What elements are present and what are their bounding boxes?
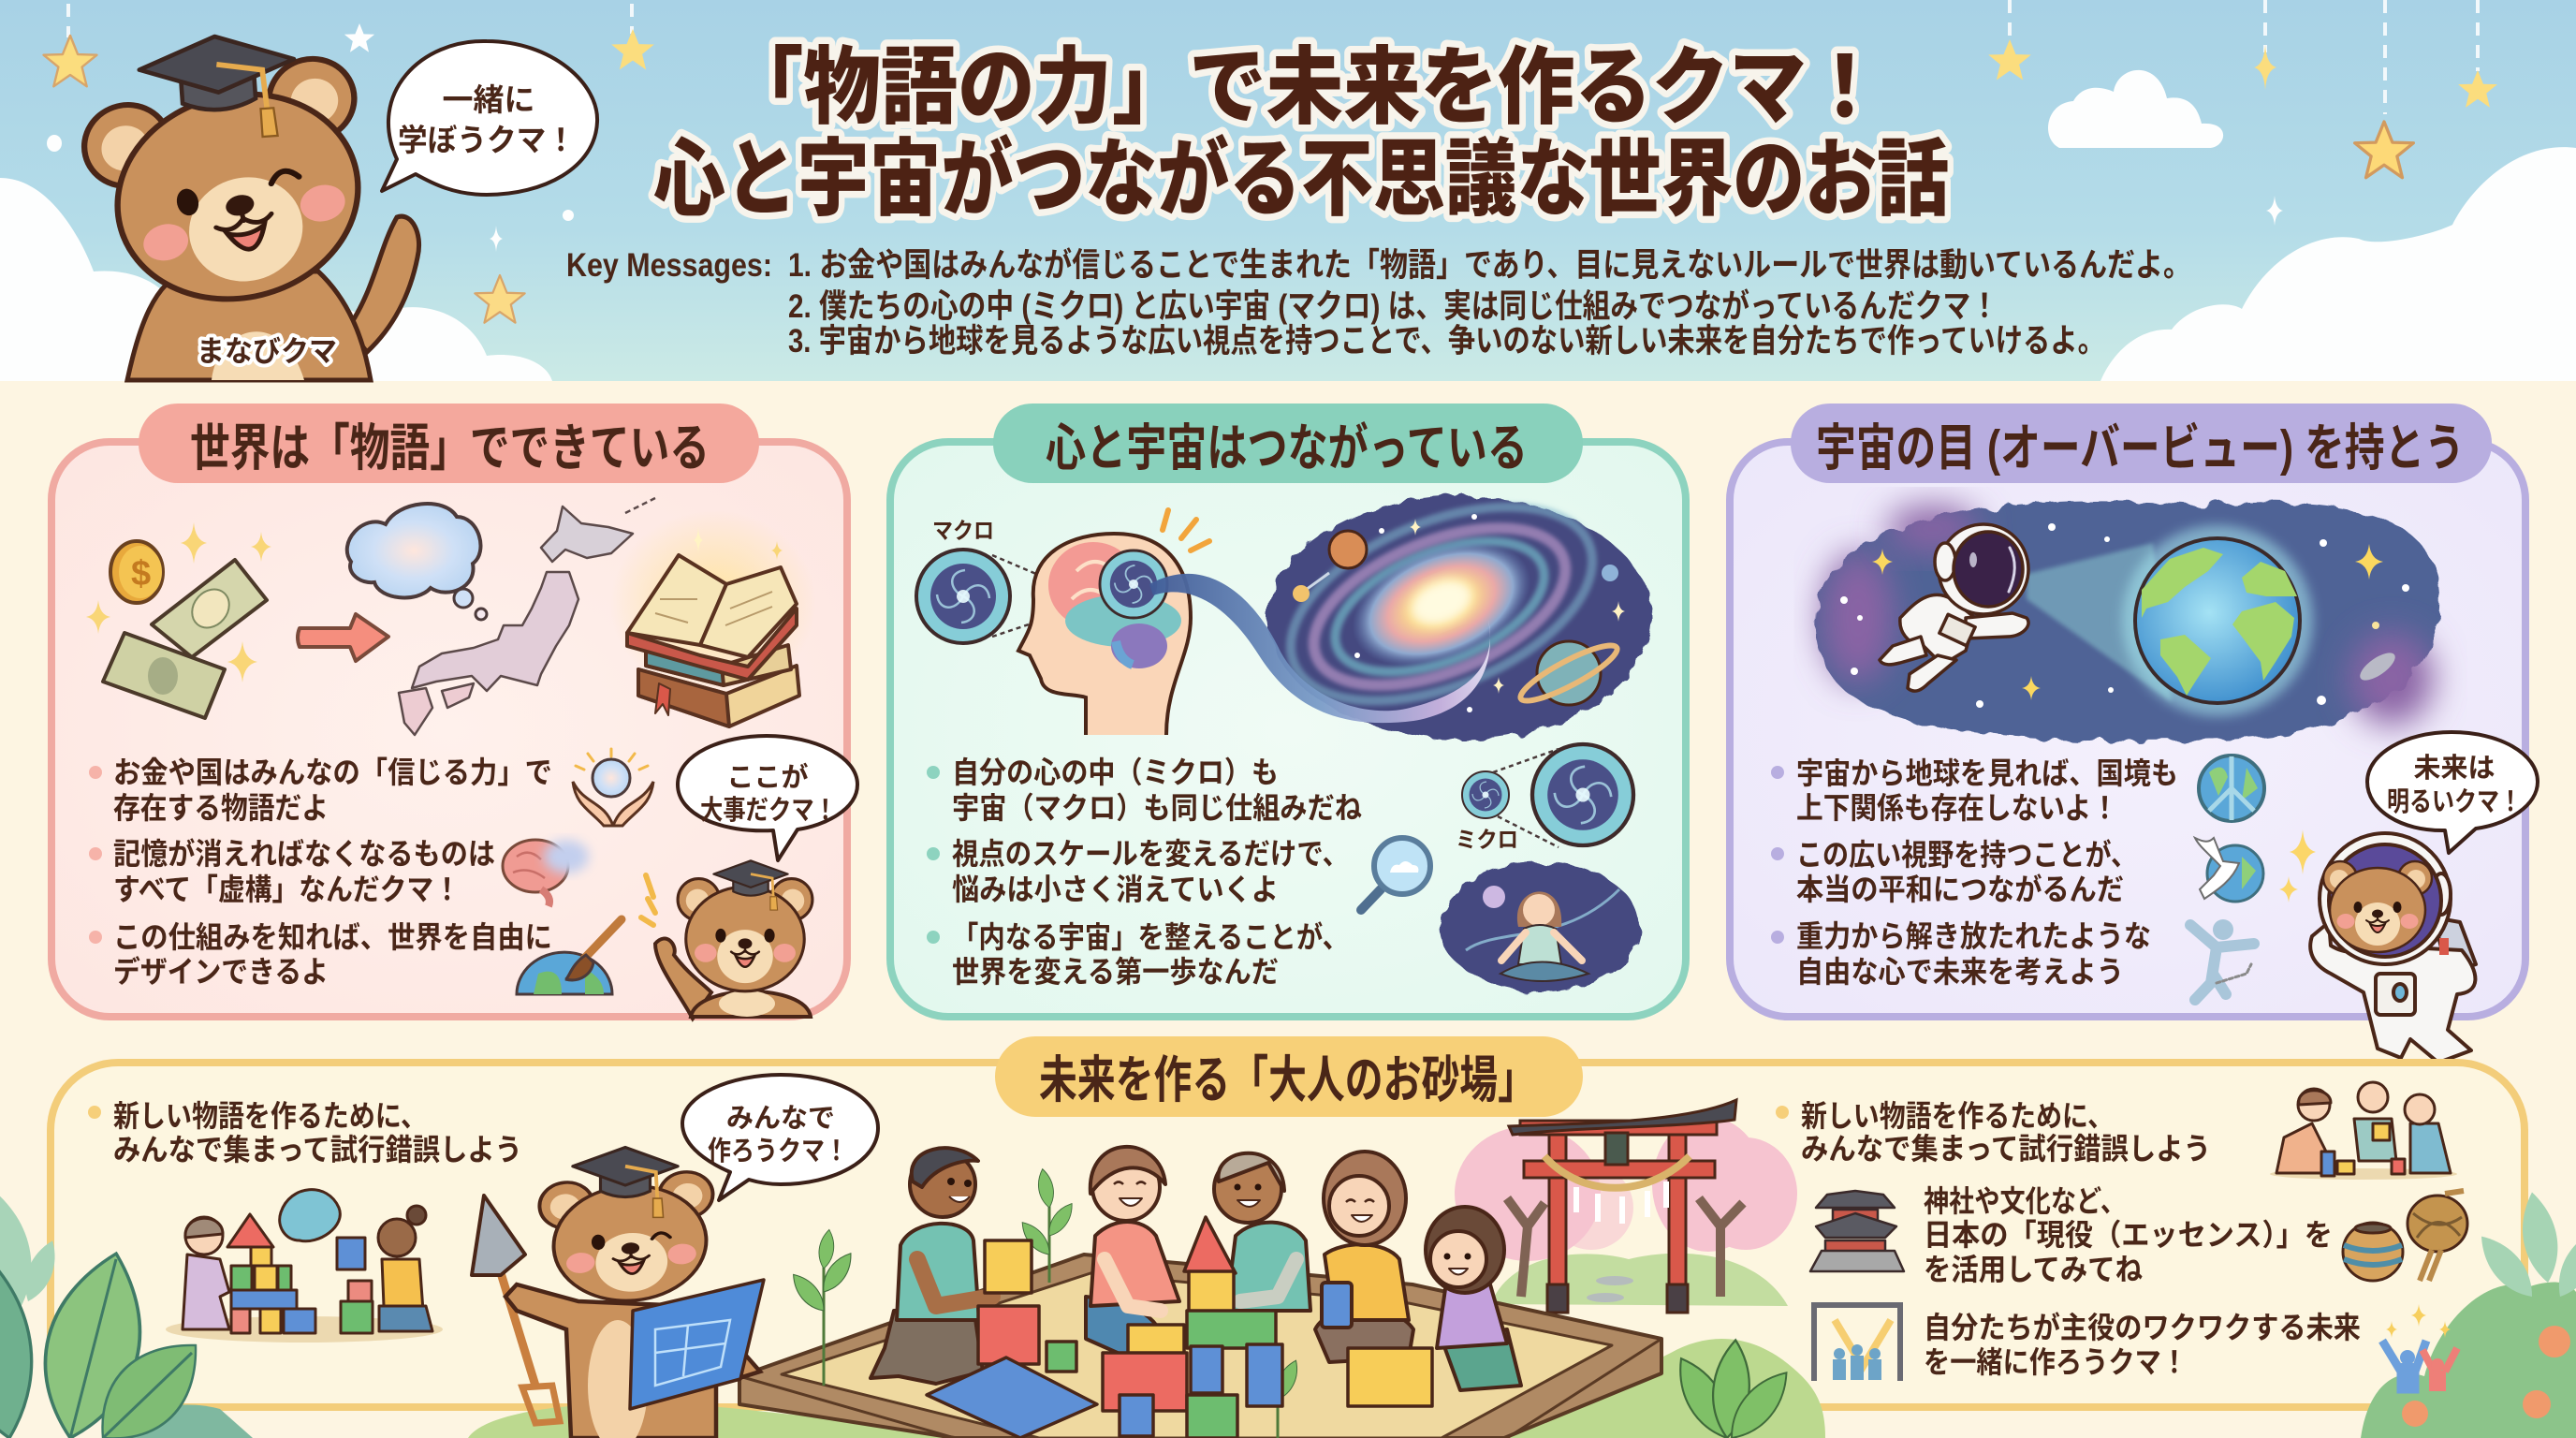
bullet list: 本当の平和につながるんだ	[1796, 873, 2124, 906]
illustration: sprouts	[787, 1167, 1798, 1438]
speech bubble: bright future	[2367, 732, 2538, 853]
bullet list: right: 日本の「現役（エッセンス）」を	[1924, 1218, 2333, 1252]
foliage: right bush	[2361, 1189, 2576, 1438]
bullet list: この仕組みを知れば、世界を自由に	[113, 920, 552, 954]
stream connecting brain to galaxy	[1149, 574, 1490, 723]
bullet list: お金や国はみんなの「信じる力」で	[113, 756, 552, 789]
bullet list: この広い視野を持つことが、	[1796, 838, 2137, 872]
panel: mind and universe are connected	[890, 404, 1686, 1017]
icon: micro circles: ミクロ	[1456, 828, 1518, 853]
speech bubble: together: 一緒に	[442, 82, 535, 117]
key messages: 1. お金や国はみんなが信じることで生まれた「物語」であり、目に見えないルールで世界は動いているんだよ。	[788, 247, 2191, 284]
illustration: galaxy	[1263, 468, 1652, 740]
bullet list: left: 新しい物語を作るために、	[113, 1099, 427, 1133]
person 5	[1426, 1207, 1521, 1390]
icon: peace earth	[2199, 756, 2264, 821]
bullet list: 上下関係も存在しないよ！	[1796, 791, 2118, 825]
illustration: story books	[610, 510, 816, 726]
icon: temple	[1810, 1191, 1904, 1271]
bullet list: right: みんなで集まって試行錯誤しよう	[1801, 1132, 2211, 1166]
panel heading	[139, 404, 759, 483]
bullet list: 自分の心の中（ミクロ）も	[952, 756, 1279, 789]
panel heading: 心と宇宙はつながっている	[1046, 420, 1528, 477]
icon: magnifying glass	[1361, 838, 1430, 910]
speech bubble: together	[382, 41, 597, 195]
key messages	[566, 247, 2191, 360]
icon: money: $	[131, 554, 151, 594]
bullet list: 自由な心で未来を考えよう	[1796, 955, 2124, 989]
speech bubble: let's build together: 作ろうクマ！	[708, 1136, 848, 1167]
bullet list: デザインできるよ	[113, 955, 329, 989]
cloud: small	[2048, 70, 2223, 148]
person 3	[1214, 1153, 1310, 1311]
icon: meditating person	[1440, 862, 1640, 991]
bullet list	[927, 756, 1362, 989]
bullet list: すべて「虚構」なんだクマ！	[113, 873, 461, 906]
bullet list: left: みんなで集まって試行錯誤しよう	[113, 1133, 522, 1167]
hanging star strings	[68, 0, 2478, 114]
bullet list: right: 自分たちが主役のワクワクする未来	[1924, 1311, 2361, 1344]
title: 「物語の力」で未来を作るクマ！	[726, 41, 1883, 135]
icon: people stacking blocks	[166, 1190, 443, 1343]
speech bubble: bright future: 未来は	[2413, 753, 2496, 784]
icon: money	[86, 522, 271, 718]
illustration: map of Japan	[399, 498, 655, 735]
bullet list: 「内なる宇宙」を整えることが、	[952, 920, 1349, 954]
icon: pot and craft	[2343, 1191, 2467, 1281]
bullet list: left	[88, 1099, 522, 1167]
person 2	[1086, 1147, 1179, 1357]
title: 心と宇宙がつながる不思議な世界のお話	[653, 133, 1949, 227]
building blocks	[927, 1217, 1432, 1438]
ground grass	[468, 1339, 1825, 1438]
person 4	[1315, 1152, 1413, 1362]
bullet list: 世界を変える第一歩なんだ	[952, 955, 1279, 989]
bullet list: 宇宙から地球を見れば、国境も	[1796, 756, 2178, 790]
panel heading	[1791, 404, 2492, 483]
icon: cheering people	[2382, 1304, 2457, 1391]
icon: paintbrush globe	[517, 919, 622, 994]
bullet list	[89, 756, 552, 989]
speech bubble: bright future: 明るいクマ！	[2387, 787, 2522, 817]
illustration: torii and cherry trees	[1455, 1100, 1797, 1313]
bullet list: right	[1776, 1099, 2361, 1379]
panel: cosmic overview	[1730, 404, 2538, 1063]
icon: thought cloud	[347, 504, 487, 620]
bullet list: 視点のスケールを変えるだけで、	[952, 837, 1349, 871]
name label: まなびクマ	[197, 335, 337, 368]
icon: dove and earth	[2195, 838, 2263, 902]
speech bubble: this matters: 大事だクマ！	[700, 795, 837, 826]
illustration: sandbox	[739, 1255, 1661, 1438]
header sky band	[0, 0, 2576, 381]
character: bear with blueprint	[472, 1147, 764, 1438]
illustration: head with brain	[1018, 510, 1209, 735]
cloud: left	[0, 178, 552, 381]
icon: micro circles	[1456, 744, 1633, 853]
panel heading: 未来を作る「大人のお砂場」	[1039, 1052, 1536, 1108]
speech bubble: together: 学ぼうクマ！	[398, 123, 576, 157]
bullet list: right: を一緒に作ろうクマ！	[1924, 1345, 2188, 1379]
foliage: left	[0, 1191, 253, 1438]
title	[653, 41, 1949, 227]
stars	[43, 23, 2497, 323]
panel: adult sandbox	[0, 1036, 2576, 1438]
speech bubble: this matters	[678, 736, 857, 860]
astronaut	[1880, 524, 2028, 691]
icon: free figure	[2190, 919, 2254, 1000]
icon: macro circle	[916, 519, 1062, 643]
illustration: space with earth	[1815, 501, 2440, 741]
icon: family building	[2270, 1082, 2457, 1180]
person 1	[871, 1148, 992, 1384]
people playing with blocks	[871, 1147, 1521, 1390]
bullet list: right: を活用してみてね	[1924, 1253, 2143, 1286]
key messages: 2. 僕たちの心の中 (ミクロ) と広い宇宙 (マクロ) は、実は同じ仕組みでつながっているんだクマ！	[788, 288, 1998, 325]
panel heading: 世界は「物語」でできている	[190, 420, 710, 477]
bullet list: 宇宙（マクロ）も同じ仕組みだね	[952, 791, 1362, 825]
bullet list: right: 新しい物語を作るために、	[1801, 1099, 2114, 1133]
character: astronaut bear	[2279, 829, 2476, 1063]
icon: macro circle: マクロ	[932, 519, 994, 544]
key messages: Key Messages:	[566, 247, 772, 284]
bullet list: 記憶が消えればなくなるものは	[113, 837, 495, 871]
icon: brain	[503, 840, 589, 906]
key messages: 3. 宇宙から地球を見るような広い視点を持つことで、争いのない新しい未来を自分たちで作っていけるよ。	[788, 323, 2105, 360]
bullet list: 重力から解き放たれたような	[1796, 919, 2151, 953]
character: manabi bear	[76, 31, 419, 380]
bullet list	[1771, 756, 2178, 989]
cloud: right	[2100, 147, 2576, 381]
speech bubble: let's build together: みんなで	[726, 1104, 835, 1134]
panel heading	[995, 1036, 1583, 1117]
speech bubble: this matters: ここが	[726, 761, 809, 793]
arrow	[298, 614, 388, 661]
panel heading	[993, 404, 1583, 483]
panel: the world is made of stories	[51, 404, 857, 1019]
speech bubble: let's build together	[682, 1075, 878, 1200]
icon: hands and orb	[573, 749, 653, 826]
character: bear pointing	[641, 860, 812, 1019]
bullet list: right: 神社や文化など、	[1924, 1184, 2126, 1218]
icon: stage	[1814, 1305, 1900, 1381]
bullet list: 悩みは小さく消えていくよ	[952, 873, 1279, 906]
bullet list: 存在する物語だよ	[113, 791, 329, 825]
